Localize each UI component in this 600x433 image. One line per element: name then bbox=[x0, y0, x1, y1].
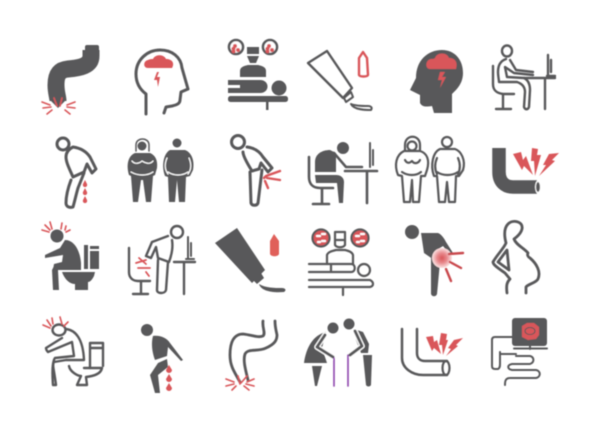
icon: solid seated desk worker bbox=[309, 142, 377, 204]
icon: solid pipe with lightning bbox=[499, 148, 559, 194]
icon: outlined person on toilet with headache bbox=[43, 317, 103, 385]
icon: outlined pipe with lightning bbox=[402, 329, 463, 375]
icon: outlined obese couple bbox=[396, 137, 464, 202]
icon: solid obese couple bbox=[128, 138, 194, 202]
icon: head outline with storm cloud bbox=[136, 50, 188, 114]
icon: outlined person bending at desk with knee pain bbox=[129, 226, 195, 294]
icon: solid person on toilet with headache bbox=[42, 222, 99, 290]
icon: outlined colon with pain bbox=[226, 321, 277, 390]
icon: elderly couple with canes bbox=[304, 318, 372, 386]
icon: outlined ointment tube and suppository bbox=[308, 51, 372, 110]
icon: outlined surgery scene bbox=[309, 230, 373, 295]
icon: endoscopy with monitor bbox=[492, 318, 547, 385]
icon: solid head with storm cloud bbox=[410, 50, 463, 113]
icon: outlined pregnant woman bbox=[493, 221, 539, 293]
icon: solid surgery scene bbox=[228, 40, 288, 110]
icon: bent person with blood drops bbox=[57, 138, 96, 207]
icon: solid colon with pain bbox=[42, 45, 99, 114]
icon: solid bent man with hip pain bbox=[405, 225, 463, 296]
icon: solid person with blood drops bbox=[141, 324, 183, 393]
icon: bent person with leg pain bbox=[232, 136, 280, 205]
icon: outlined seated desk worker bbox=[493, 46, 555, 109]
icon: solid ointment tube and suppository bbox=[215, 228, 285, 292]
